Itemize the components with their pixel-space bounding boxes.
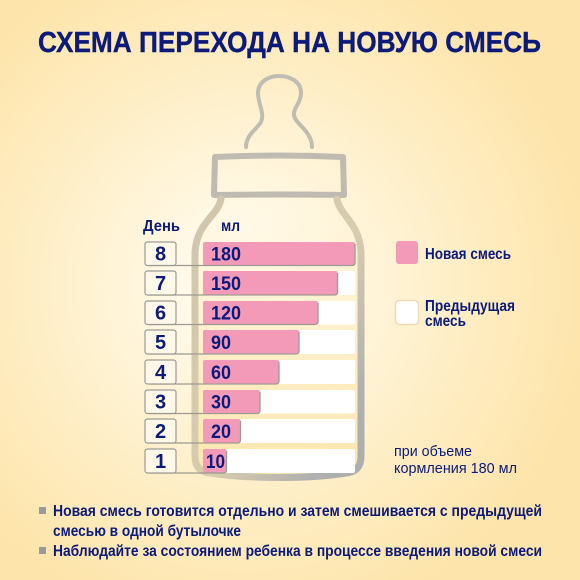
bottle body xyxy=(195,199,361,478)
row: day 4, 60 ml: 4 xyxy=(155,362,167,384)
row: day 8, 180 ml xyxy=(145,242,355,266)
legend: previous formula xyxy=(396,298,515,330)
bullet note: preparation: смесью в одной бутылочке xyxy=(53,523,241,540)
row: day 1, 10 ml: 1 xyxy=(155,451,166,473)
row: day 7, 150 ml: 150 xyxy=(211,273,241,295)
bullet note: preparation xyxy=(39,503,542,540)
row: day 8, 180 ml: 8 xyxy=(155,244,166,266)
row: day 8, 180 ml: 180 xyxy=(211,244,241,266)
row: day 2, 20 ml xyxy=(145,419,355,443)
note: feeding volume: при объеме xyxy=(394,443,472,460)
row: day 5, 90 ml xyxy=(145,330,355,354)
bottle cap xyxy=(214,156,344,195)
legend: new formula: Новая смесь xyxy=(425,246,511,263)
row: day 4, 60 ml: 60 xyxy=(211,362,231,384)
row: day 5, 90 ml: 5 xyxy=(155,332,166,354)
row: day 6, 120 ml xyxy=(145,301,355,324)
bullet note: preparation: Новая смесь готовится отдельно и затем смешивается с предыдущей xyxy=(53,503,542,520)
column header: day: День xyxy=(143,218,180,235)
title: СХЕМА ПЕРЕХОДА НА НОВУЮ СМЕСЬ xyxy=(38,27,541,59)
legend: previous formula: Предыдущая xyxy=(425,298,515,315)
row: day 3, 30 ml: 3 xyxy=(155,392,166,414)
row: day 5, 90 ml: 90 xyxy=(211,332,231,354)
row: day 3, 30 ml: 30 xyxy=(211,392,231,414)
row: day 6, 120 ml: 120 xyxy=(211,302,241,324)
icon: baby bottle outline xyxy=(195,76,361,478)
row: day 2, 20 ml: 20 xyxy=(211,421,231,443)
row: day 4, 60 ml xyxy=(145,360,355,384)
row: day 6, 120 ml: 6 xyxy=(155,302,166,324)
note: feeding volume: кормления 180 мл xyxy=(394,460,517,477)
row: day 7, 150 ml xyxy=(145,271,355,295)
row: day 3, 30 ml xyxy=(145,390,355,414)
bottle nipple xyxy=(246,76,312,147)
row: day 7, 150 ml: 7 xyxy=(155,273,166,295)
column header: ml: мл xyxy=(221,218,240,235)
note: feeding volume xyxy=(394,443,517,477)
row: day 1, 10 ml: 10 xyxy=(206,451,225,473)
row: day 1, 10 ml xyxy=(145,449,355,473)
row: day 2, 20 ml: 2 xyxy=(155,421,166,443)
legend: previous formula: смесь xyxy=(425,313,466,330)
legend: new formula xyxy=(396,241,511,264)
